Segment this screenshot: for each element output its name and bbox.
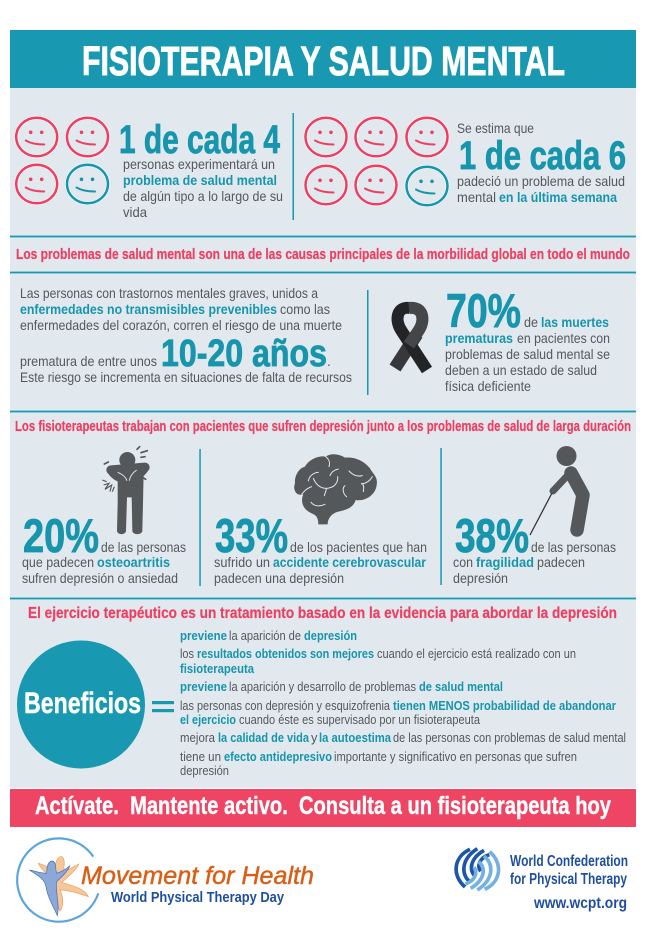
list: benefits: y — [311, 730, 318, 745]
list: benefits: cuando éste es supervisado por un fisioterapeuta — [239, 712, 481, 727]
icon: six smiley faces — [306, 118, 448, 205]
icon: dancing figures in ring — [17, 838, 98, 922]
panel: 20% osteoartritis: de las personas — [101, 540, 186, 555]
text: intro: Se estima que — [457, 121, 534, 136]
panel: 38% fragilidad: de las personas — [531, 540, 616, 555]
text: description of 1 in 4: problema de salud mental — [123, 173, 277, 188]
panel: 20% osteoartritis: que padecen — [22, 555, 94, 570]
panel: 70%: física deficiente — [445, 379, 531, 394]
icon: WCPT swirl — [456, 849, 499, 890]
logo: World Confederation for Physical Therapy: www.wcpt.org — [533, 895, 627, 912]
text: description of 1 in 6: mental — [457, 190, 496, 205]
panel: 70%: deben a un estado de salud — [445, 363, 597, 378]
icon: black ribbon — [395, 308, 427, 370]
list: benefits: la autoestima — [319, 730, 392, 745]
list: benefits: la aparición de — [229, 628, 301, 643]
text: description of 1 in 4: de algún tipo a lo largo de su — [123, 189, 283, 204]
panel: 38% fragilidad — [453, 509, 616, 586]
list: benefits: previene — [180, 628, 227, 643]
panel: 38% fragilidad: padecen — [537, 555, 585, 570]
text: description of 1 in 6: padeció un problema de salud — [457, 174, 625, 189]
statistic: 10-20 años: 10-20 años — [161, 333, 327, 375]
list: benefits: depresión — [304, 628, 357, 643]
panel: 1 de cada 4 — [16, 118, 283, 220]
logo: World Confederation for Physical Therapy — [456, 849, 628, 912]
statistic: 33%: 33% — [215, 509, 288, 562]
logo: Movement for Health: World Physical Therapy Day — [111, 889, 285, 906]
statistic: 70%: 70% — [446, 284, 521, 337]
icon: four smiley faces — [16, 118, 108, 203]
list: benefits: los — [180, 646, 194, 661]
panel: 20% osteoartritis: osteoartritis — [97, 555, 170, 570]
panel: muerte prematura: Las personas con trastornos mentales graves, unidos a — [20, 286, 318, 301]
panel: 70%: en pacientes con — [517, 331, 610, 346]
callout: beneficios circle: Beneficios — [24, 687, 141, 720]
panel: 33% accidente cerebrovascular: accidente cerebrovascular — [273, 555, 427, 570]
panel: 70%: prematuras — [445, 331, 513, 346]
icon: brain — [294, 454, 377, 524]
panel: 70%: de — [524, 315, 538, 330]
callout: beneficios circle — [17, 640, 145, 768]
list: benefits: importante y significativo en personas que sufren — [334, 749, 577, 764]
panel: 38% fragilidad: fragilidad — [476, 555, 534, 570]
panel: muerte prematura: enfermedades del corazón, corren el riesgo de una muerte — [20, 318, 342, 333]
list: benefits: previene — [180, 679, 227, 694]
text: description of 1 in 4: vida — [123, 205, 147, 220]
icon: frail person with cane — [530, 446, 583, 535]
panel: 20% osteoartritis: sufren depresión o ansiedad — [22, 571, 178, 586]
list: benefits: de salud mental — [419, 679, 503, 694]
list: benefits — [180, 628, 626, 778]
panel: 38% fragilidad: depresión — [453, 571, 508, 586]
list: benefits: resultados obtenidos son mejores — [197, 646, 374, 661]
panel: 33% accidente cerebrovascular: padecen una depresión — [214, 571, 344, 586]
list: benefits: depresión — [180, 763, 229, 778]
list: benefits: la calidad de vida — [218, 730, 310, 745]
text: description of 1 in 4: personas experimentará un — [123, 157, 275, 172]
logo: Movement for Health — [17, 838, 314, 922]
statistic: 20%: 20% — [23, 509, 99, 562]
list: benefits: fisioterapeuta — [180, 661, 255, 676]
list: benefits: la aparición y desarrollo de problemas — [229, 679, 416, 694]
statistic: 38%: 38% — [455, 509, 529, 562]
panel: muerte prematura — [20, 286, 352, 385]
panel: muerte prematura: como las — [280, 302, 330, 317]
list: benefits: cuando el ejercicio está realizado con un — [377, 646, 576, 661]
logo: Movement for Health: Movement for Health — [81, 862, 314, 890]
panel: 1 de cada 6 — [306, 118, 626, 205]
panel: muerte prematura: prematura de entre unos — [20, 354, 157, 369]
list: benefits: mejora — [180, 730, 216, 745]
panel: 20% osteoartritis — [22, 509, 186, 586]
panel: 70%: las muertes — [541, 315, 609, 330]
statistic: 1 de cada 4: 1 de cada 4 — [119, 118, 281, 162]
text: description of 1 in 4 — [123, 157, 283, 220]
list: benefits: tienen MENOS probabilidad de abandonar — [393, 698, 616, 713]
panel: 33% accidente cerebrovascular: de los pacientes que han — [290, 540, 427, 555]
panel: 33% accidente cerebrovascular — [214, 509, 427, 586]
panel: 33% accidente cerebrovascular: sufrido un — [214, 555, 270, 570]
panel: muerte prematura: enfermedades no transmisibles prevenibles — [20, 302, 277, 317]
text: description of 1 in 6 — [457, 174, 625, 205]
panel: 70%: problemas de salud mental se — [445, 347, 610, 362]
icon: person with joint pain — [102, 447, 147, 534]
panel: muerte prematura: Este riesgo se incrementa en situaciones de falta de recursos — [20, 370, 352, 385]
icon: equals sign — [152, 701, 174, 712]
title banner — [10, 30, 636, 88]
text: description of 1 in 6: en la última semana — [499, 190, 617, 205]
panel: 38% fragilidad: con — [453, 555, 473, 570]
panel: 70% — [445, 284, 610, 394]
list: benefits: el ejercicio — [180, 712, 236, 727]
list: benefits: tiene un — [180, 749, 221, 764]
list: benefits: las personas con depresión y esquizofrenia — [180, 698, 391, 713]
panel: muerte prematura: . — [327, 354, 331, 369]
list: benefits: efecto antidepresivo — [224, 749, 332, 764]
